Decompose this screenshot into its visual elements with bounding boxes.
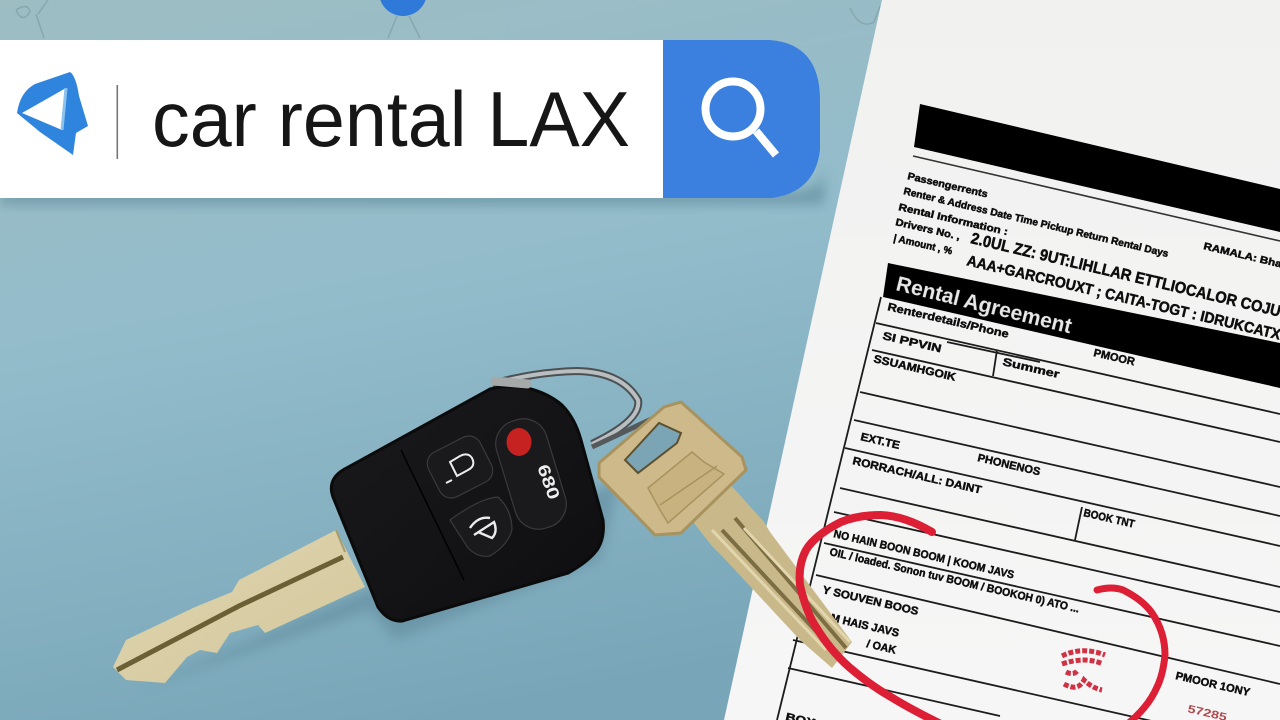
silver key ring: [492, 371, 660, 447]
button: lock: [450, 497, 512, 556]
form labels: [784, 301, 1252, 720]
map pin and faint map marks: [16, 0, 880, 38]
form labels: NO HAIN BOON BOOM | KOOM JAVS: [832, 528, 1015, 582]
brass key blade: [690, 482, 852, 668]
paper: rental agreement: [724, 0, 1280, 720]
document fine print: Drivers No. ,: [894, 217, 961, 243]
search bar shadow: [0, 170, 824, 204]
black Rental Agreement band: [883, 263, 1280, 388]
document fine print: | Amount , %: [892, 233, 953, 257]
button: trunk: [423, 432, 497, 502]
document fine print: Rental Information :: [897, 202, 1009, 238]
heading: Rental Agreement: Rental Agreement: [894, 273, 1074, 338]
button: panic: [490, 413, 572, 535]
panic glyph: 680: [533, 462, 563, 502]
divider: [116, 85, 118, 159]
form labels: RORRACH/ALL: DAINT: [851, 455, 983, 497]
rule below top bar: [913, 156, 1280, 241]
fob seam: [401, 450, 464, 580]
document fine print: [892, 171, 1280, 344]
key shadow: [135, 480, 620, 690]
black key fob body: [331, 386, 603, 621]
document fine print: RAMALA: Bha: [1202, 241, 1280, 271]
red stamp: [1062, 651, 1105, 690]
search button: [663, 40, 820, 198]
form labels: SSUAMHGOIK: [872, 353, 957, 384]
red panic dot: [506, 428, 532, 456]
document fine print: Renter & Address Date Time Pickup Return Rental Days: [902, 186, 1170, 260]
magnifier icon: [706, 82, 776, 155]
car key set: [113, 371, 852, 690]
search query text: car rental LAX: [152, 75, 630, 163]
form labels: BOOK TNT: [1082, 507, 1136, 531]
brass key head: [599, 402, 746, 535]
form labels: PHONENOS: [976, 452, 1041, 478]
form labels: EXT.TE: [859, 431, 901, 452]
flat metal key blade: [113, 530, 365, 683]
search input: [0, 40, 664, 198]
form grid: [777, 297, 1280, 720]
form labels: / OAK: [865, 638, 897, 657]
form labels: Y SOUVEN BOOS: [821, 584, 920, 618]
form labels: Renterdetails/Phone: [886, 301, 1010, 341]
search bar: [0, 40, 820, 198]
logo icon: [17, 72, 88, 155]
document fine print: Passengerrents: [906, 171, 989, 200]
form labels: PMOOR 1ONY: [1174, 670, 1252, 699]
form labels: Summer: [1001, 356, 1061, 381]
top black header bar: [914, 104, 1280, 232]
form labels: SI PPVIN: [881, 330, 943, 355]
fob top clasp: [491, 376, 531, 389]
form labels: OIL / loaded. Sonon tuv BOOM / BOOKOH 0) ATO ...: [828, 546, 1080, 616]
red ink circle: [800, 515, 1165, 720]
form labels: M HAIS JAVS: [829, 612, 900, 640]
form labels: PMOOR: [1092, 347, 1136, 368]
